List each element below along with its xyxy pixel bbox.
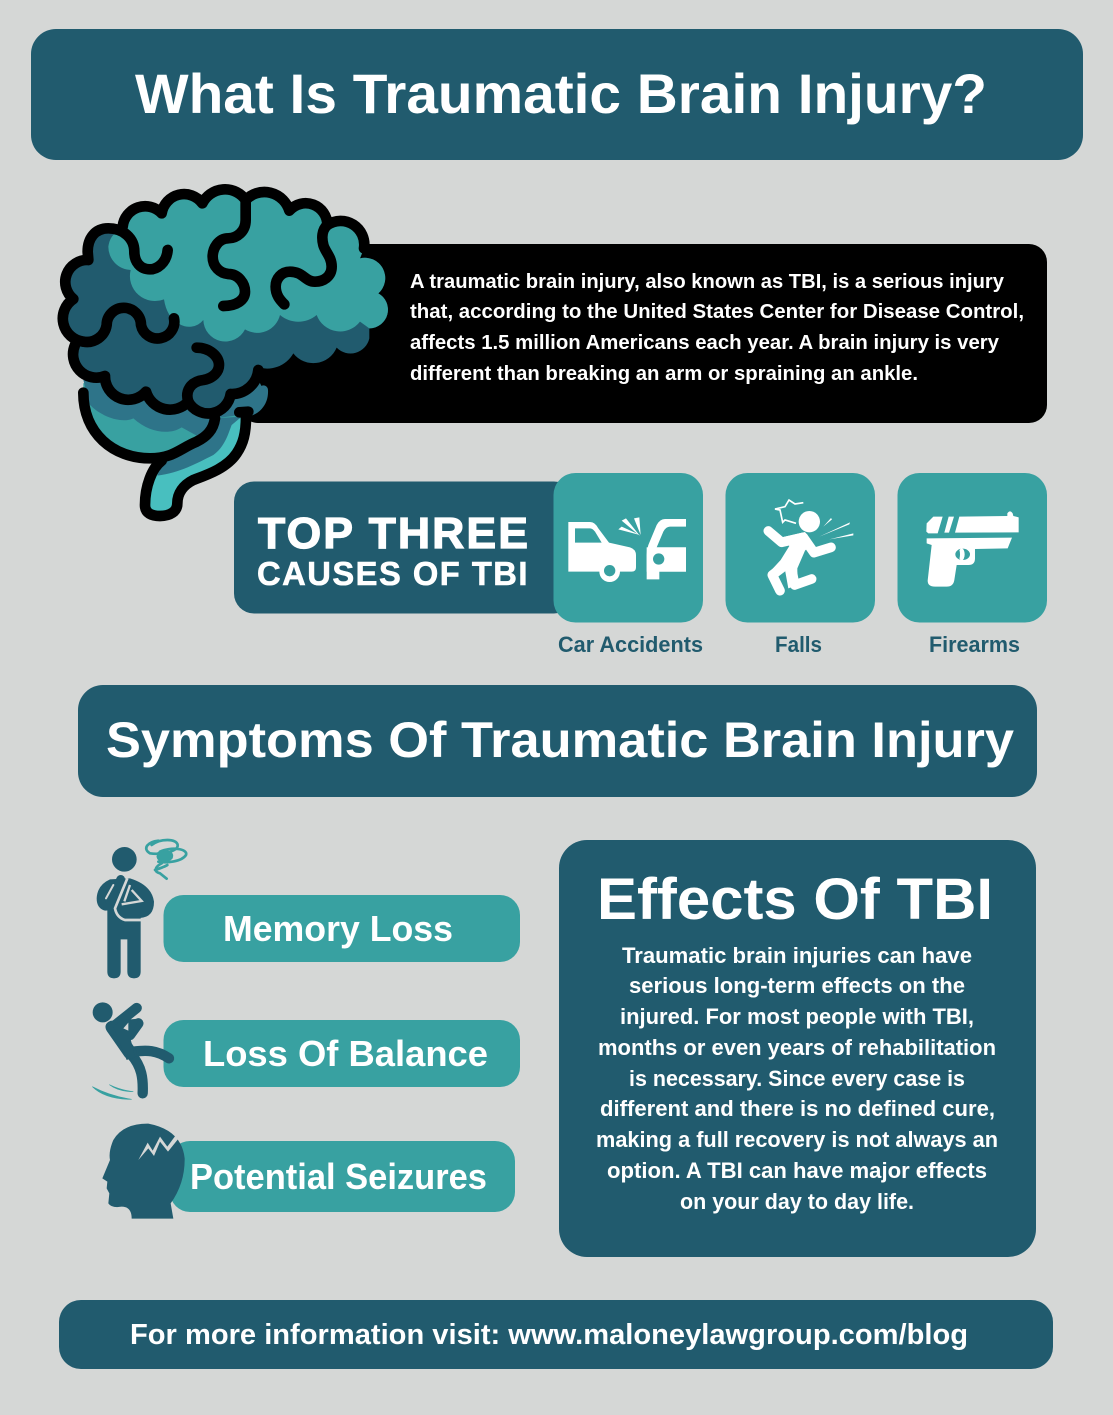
definition text: that, according to the United States Center for Disease Control, <box>410 301 1024 323</box>
icon card: firearms <box>898 473 1047 622</box>
definition text: affects 1.5 million Americans each year. A brain injury is very <box>410 332 1000 354</box>
icon card: car accidents <box>554 473 703 622</box>
effects body text <box>596 943 998 1214</box>
symptom: memory loss <box>97 840 520 978</box>
panel: top three causes <box>234 482 574 614</box>
cause labels: Firearms <box>929 632 1020 657</box>
icon card: falls <box>726 473 875 622</box>
icon: confused person <box>97 840 186 978</box>
effects body text: on your day to day life. <box>680 1189 914 1214</box>
effects body text: injured. For most people with TBI, <box>620 1004 974 1029</box>
effects body text: is necessary. Since every case is <box>629 1066 965 1091</box>
cause labels: Car Accidents <box>558 632 703 657</box>
cause labels: Falls <box>775 632 822 657</box>
definition text: different than breaking an arm or spraining an ankle. <box>410 363 918 385</box>
icon: brain <box>63 189 388 516</box>
footer bar <box>59 1300 1053 1369</box>
symptoms heading: Symptoms Of Traumatic Brain Injury <box>106 712 1014 768</box>
icon: slipping person <box>92 1002 169 1099</box>
definition text: A traumatic brain injury, also known as TBI, is a serious injury <box>410 271 1005 293</box>
heading: causes of TBI: CAUSES OF TBI <box>257 555 529 592</box>
effects body text: Traumatic brain injuries can have <box>622 943 972 968</box>
effects body text: making a full recovery is not always an <box>596 1127 998 1152</box>
symptom: potential seizures <box>102 1124 515 1219</box>
heading: top three: TOP THREE <box>258 509 530 558</box>
symptom: loss of balance <box>92 1002 520 1099</box>
icon: car crash <box>568 517 686 582</box>
effects body text: different and there is no defined cure, <box>600 1096 995 1121</box>
panel: effects of TBI <box>559 840 1036 1257</box>
effects heading: Effects Of TBI <box>597 867 993 932</box>
label: potential seizures: Potential Seizures <box>190 1156 487 1197</box>
icon: handgun <box>926 511 1019 587</box>
effects body text: months or even years of rehabilitation <box>598 1035 996 1060</box>
label: loss of balance: Loss Of Balance <box>203 1033 488 1074</box>
definition text <box>410 271 1024 385</box>
cause labels <box>558 632 1020 657</box>
icon: head with lightning <box>102 1124 185 1219</box>
label: memory loss: Memory Loss <box>223 908 453 949</box>
title: What Is Traumatic Brain Injury? <box>135 62 987 125</box>
symptoms banner <box>78 685 1037 797</box>
title banner <box>31 29 1083 160</box>
panel: TBI definition <box>240 244 1047 423</box>
icon: swirl <box>146 840 186 879</box>
effects body text: serious long-term effects on the <box>629 973 965 998</box>
effects body text: option. A TBI can have major effects <box>607 1158 987 1183</box>
icon: falling person <box>768 500 853 591</box>
footer link text: For more information visit: www.maloneylawgroup.com/blog <box>130 1319 968 1351</box>
